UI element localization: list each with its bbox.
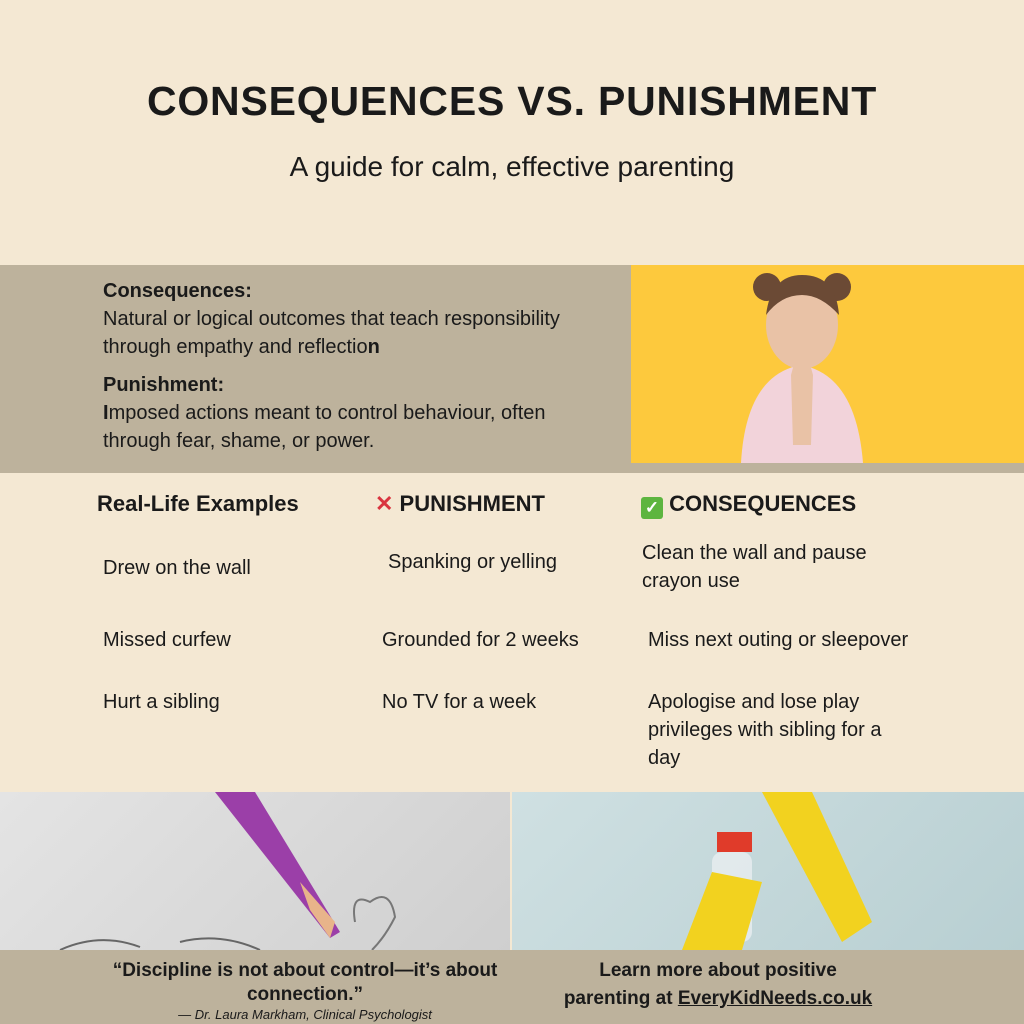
separator band	[631, 463, 1024, 473]
header: consequences: ✓	[645, 498, 659, 517]
definition: consequences: Natural or logical outcomes that teach responsibility through empathy and reflection	[103, 308, 560, 358]
definition: consequences	[103, 280, 560, 358]
header: real-life examples: Real-Life Examples	[97, 491, 299, 516]
call to action: Learn more about positive	[599, 960, 837, 981]
table: examples	[97, 491, 908, 769]
definition: punishment	[103, 374, 546, 452]
call to action	[564, 960, 872, 1009]
photo: pencil drawing heart	[0, 792, 510, 950]
definition: punishment: Punishment:	[103, 374, 224, 396]
row 3: Hurt a sibling	[103, 691, 220, 713]
title: CONSEQUENCES VS. PUNISHMENT	[147, 78, 877, 124]
table: examples: Spanking or yelling	[388, 551, 557, 573]
table: examples: Miss next outing or sleepover	[648, 629, 908, 651]
quote: “Discipline is not about control—it’s about connection.”	[113, 960, 497, 1005]
table: examples: Clean the wall and pause crayon use	[642, 542, 867, 592]
header: consequences: CONSEQUENCES	[669, 491, 856, 516]
footer	[0, 950, 1024, 1024]
table: examples: Apologise and lose play privileges with sibling for a day	[648, 691, 881, 769]
photo: girl	[631, 265, 1024, 463]
photo: cleaning gloves	[512, 792, 1024, 950]
call to action: parenting at EveryKidNeeds.co.uk	[564, 988, 872, 1009]
table: examples: Grounded for 2 weeks	[382, 629, 579, 651]
subtitle: A guide for calm, effective parenting	[290, 151, 734, 182]
table: examples: No TV for a week	[382, 691, 536, 713]
quote attribution: — Dr. Laura Markham, Clinical Psychologist	[178, 1007, 432, 1022]
definition: punishment: Imposed actions meant to control behaviour, often through fear, shame, or power.	[103, 402, 546, 452]
row 1: Drew on the wall	[103, 557, 251, 579]
header: punishment: ✕ PUNISHMENT	[375, 491, 545, 516]
panel: definitions	[0, 265, 631, 473]
definition: consequences: Consequences:	[103, 280, 252, 302]
row 2: Missed curfew	[103, 629, 231, 651]
